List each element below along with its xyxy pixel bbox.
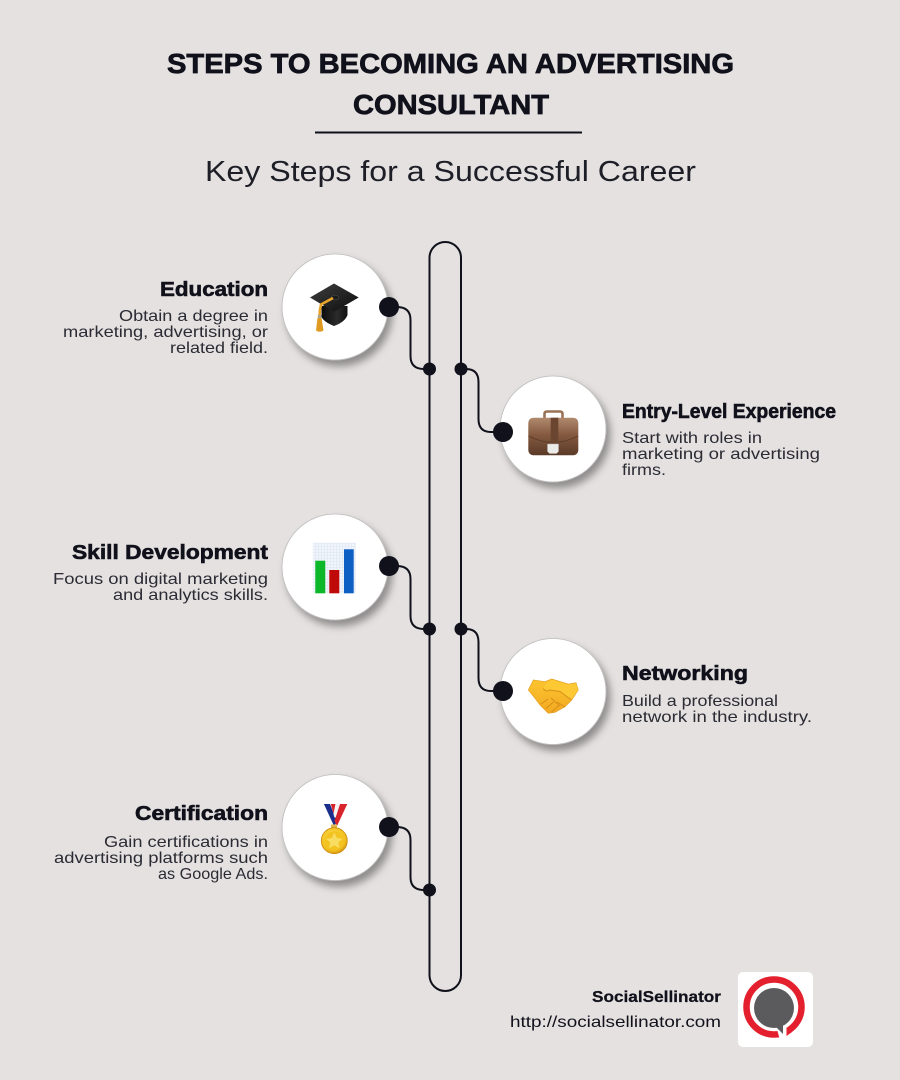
networking connector (454, 622, 513, 701)
icon: briefcase (528, 412, 578, 455)
timeline track (430, 242, 461, 991)
footer brand text: SocialSellinator (592, 989, 721, 1006)
icon: graduation cap (310, 284, 359, 332)
step: Education (63, 254, 436, 376)
education text: related field. (170, 340, 268, 357)
education connector (379, 297, 436, 376)
footer brand text: http://socialsellinator.com (510, 1014, 721, 1031)
networking circle (500, 638, 606, 744)
subtitle: Key Steps for a Successful Career (205, 156, 696, 188)
education text (63, 279, 269, 357)
skill text: and analytics skills. (113, 587, 268, 604)
title (167, 48, 734, 120)
skill text (53, 542, 268, 604)
certification text: as Google Ads. (158, 866, 268, 883)
logo (738, 972, 813, 1047)
networking text: network in the industry. (622, 709, 812, 726)
step: Certification (54, 774, 436, 896)
education text: Obtain a degree in (119, 308, 268, 325)
entry-level text: firms. (622, 462, 666, 479)
icon: bar chart (313, 543, 356, 593)
certification text: Certification (135, 803, 268, 825)
education text: marketing, advertising, or (63, 324, 269, 341)
skill text: Focus on digital marketing (53, 571, 268, 588)
skill text: Skill Development (72, 542, 268, 564)
entry-level text: marketing or advertising (622, 446, 820, 463)
entry-level text (622, 401, 836, 479)
entry-level text: Start with roles in (622, 430, 762, 447)
certification text: Gain certifications in (104, 834, 268, 851)
networking text (622, 663, 812, 726)
icon: handshake (528, 679, 578, 713)
networking text: Networking (622, 663, 748, 685)
step: Networking (454, 622, 812, 744)
education circle (282, 254, 388, 360)
education text: Education (160, 279, 268, 301)
entry-level text: Entry-Level Experience (622, 401, 836, 423)
icon: medal (321, 804, 347, 854)
certification text (54, 803, 268, 883)
title: STEPS TO BECOMING AN ADVERTISING (167, 48, 734, 79)
skill connector (379, 556, 436, 636)
entry-level circle (500, 376, 606, 482)
title: CONSULTANT (353, 89, 549, 120)
certification text: advertising platforms such (54, 850, 268, 867)
certification connector (379, 817, 436, 896)
skill circle (282, 514, 388, 620)
networking text: Build a professional (622, 693, 778, 710)
step: Entry-Level Experience (454, 362, 836, 482)
entry-level connector (454, 362, 513, 442)
step: Skill Development (53, 514, 436, 636)
certification circle (282, 774, 388, 880)
footer brand text (510, 989, 721, 1031)
